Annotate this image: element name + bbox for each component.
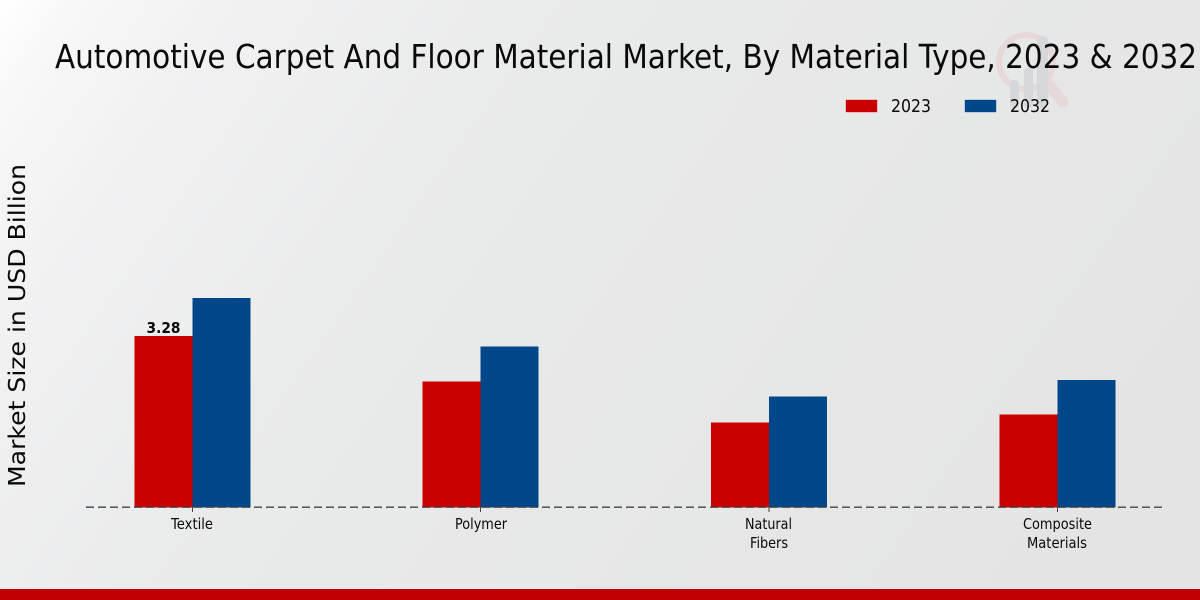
category label: Textile: Textile bbox=[170, 515, 213, 533]
bar chart bbox=[86, 298, 1164, 512]
category label: Polymer: Polymer bbox=[455, 515, 508, 533]
category label: Natural Fibers bbox=[745, 515, 792, 552]
group: Textile bbox=[134, 298, 250, 508]
category label: Composite Materials: Composite bbox=[1023, 515, 1092, 533]
data label: 3.28 bbox=[146, 319, 180, 337]
group: Composite Materials bbox=[1000, 380, 1116, 508]
watermark logo bbox=[999, 35, 1063, 108]
legend label: 2032: 2032 bbox=[1010, 96, 1050, 117]
group: Natural Fibers bbox=[711, 396, 827, 508]
footer bar bbox=[0, 589, 1200, 600]
legend label: 2023: 2023 bbox=[891, 96, 931, 117]
category label: Natural Fibers: Fibers bbox=[750, 534, 788, 552]
category label: Natural Fibers: Natural bbox=[745, 515, 792, 533]
y axis title: Market Size in USD Billion bbox=[3, 164, 31, 487]
legend swatch: 2023 bbox=[846, 100, 878, 112]
group: Polymer bbox=[422, 346, 538, 508]
legend swatch: 2032 bbox=[964, 100, 996, 112]
category label: Composite Materials: Materials bbox=[1027, 534, 1087, 552]
category label: Composite Materials bbox=[1023, 515, 1092, 552]
legend bbox=[846, 96, 1050, 117]
